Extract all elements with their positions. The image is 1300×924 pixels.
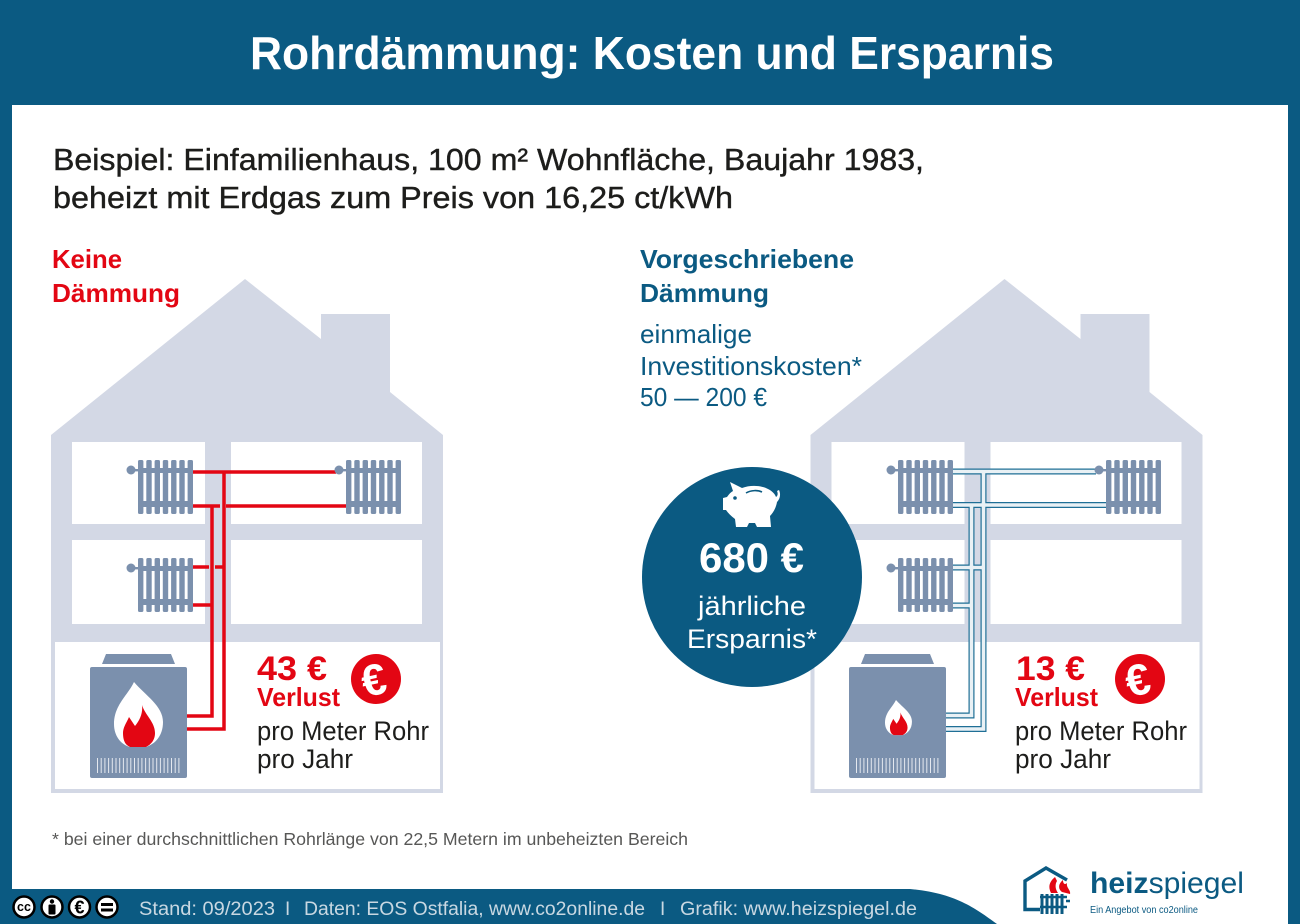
panel: house with insulation (810, 279, 1202, 793)
heading: prescribed insulation: Vorgeschriebene (640, 244, 854, 274)
icon: boiler with large flame (90, 654, 187, 778)
loss text: 13 euro: 13 € (1016, 650, 1085, 688)
icon: euro coin right (1115, 654, 1165, 707)
subtitle (53, 142, 924, 215)
footer credits: Grafik: www.heizspiegel.de (680, 899, 917, 920)
callout: annual savings: jährliche (697, 591, 806, 621)
logo: heizspiegel: Ein Angebot von co2online (1090, 905, 1198, 916)
heating pipes: uninsulated (186, 472, 346, 729)
icon: euro coin left (351, 654, 401, 707)
icons: creative commons licence: € (74, 898, 85, 918)
callout: annual savings: Ersparnis* (687, 624, 818, 654)
icons: creative commons licence: cc (17, 900, 31, 914)
heading: prescribed insulation: Dämmung (640, 278, 769, 308)
loss text: 13 euro: Verlust (1015, 682, 1098, 712)
subtitle: beheizt mit Erdgas zum Preis von 16,25 ct/kWh (53, 180, 733, 215)
title: Rohrdämmung: Kosten und Ersparnis (250, 27, 1054, 79)
investment cost text: einmalige (640, 319, 752, 349)
loss text: 13 euro: pro Jahr (1015, 744, 1111, 774)
icon: euro coin left: € (357, 654, 391, 707)
footer credits: Daten: EOS Ostfalia, www.co2online.de (304, 899, 645, 920)
callout: annual savings: 680 € (699, 534, 804, 581)
footer credits: Stand: 09/2023 (139, 899, 275, 920)
investment cost text (640, 319, 862, 412)
footer credits: I (660, 899, 665, 920)
footer credits: I (285, 899, 290, 920)
investment cost text: 50 — 200 € (640, 382, 768, 412)
panel: house without insulation (51, 279, 443, 793)
heading: prescribed insulation (640, 244, 854, 308)
subtitle: Beispiel: Einfamilienhaus, 100 m² Wohnfläche, Baujahr 1983, (53, 142, 924, 177)
icon: euro coin right: € (1121, 654, 1155, 707)
heating pipes: insulated (946, 472, 1106, 729)
investment cost text: Investitionskosten* (640, 351, 862, 381)
icon: boiler with small flame (849, 654, 946, 778)
footer credits (139, 899, 917, 920)
icon: logo house with radiator and flames (1025, 868, 1070, 914)
loss text: 43 euro (257, 650, 429, 774)
heading: no insulation: Keine (52, 244, 122, 274)
loss text: 13 euro (1015, 650, 1187, 774)
heading: no insulation: Dämmung (52, 278, 180, 308)
callout: annual savings (642, 467, 862, 687)
icons: creative commons licence (14, 896, 118, 918)
loss text: 43 euro: pro Jahr (257, 744, 353, 774)
logo: heizspiegel (1025, 867, 1244, 916)
loss text: 43 euro: 43 € (257, 650, 327, 688)
footnote: * bei einer durchschnittlichen Rohrlänge von 22,5 Metern im unbeheizten Bereich (52, 829, 688, 849)
loss text: 13 euro: pro Meter Rohr (1015, 716, 1187, 746)
loss text: 43 euro: pro Meter Rohr (257, 716, 429, 746)
logo: heizspiegel: heizspiegel (1090, 867, 1244, 900)
loss text: 43 euro: Verlust (257, 682, 340, 712)
icon: piggy bank (723, 482, 780, 527)
radiators (886, 460, 1161, 612)
heading: no insulation (52, 244, 180, 308)
radiators (126, 460, 401, 612)
